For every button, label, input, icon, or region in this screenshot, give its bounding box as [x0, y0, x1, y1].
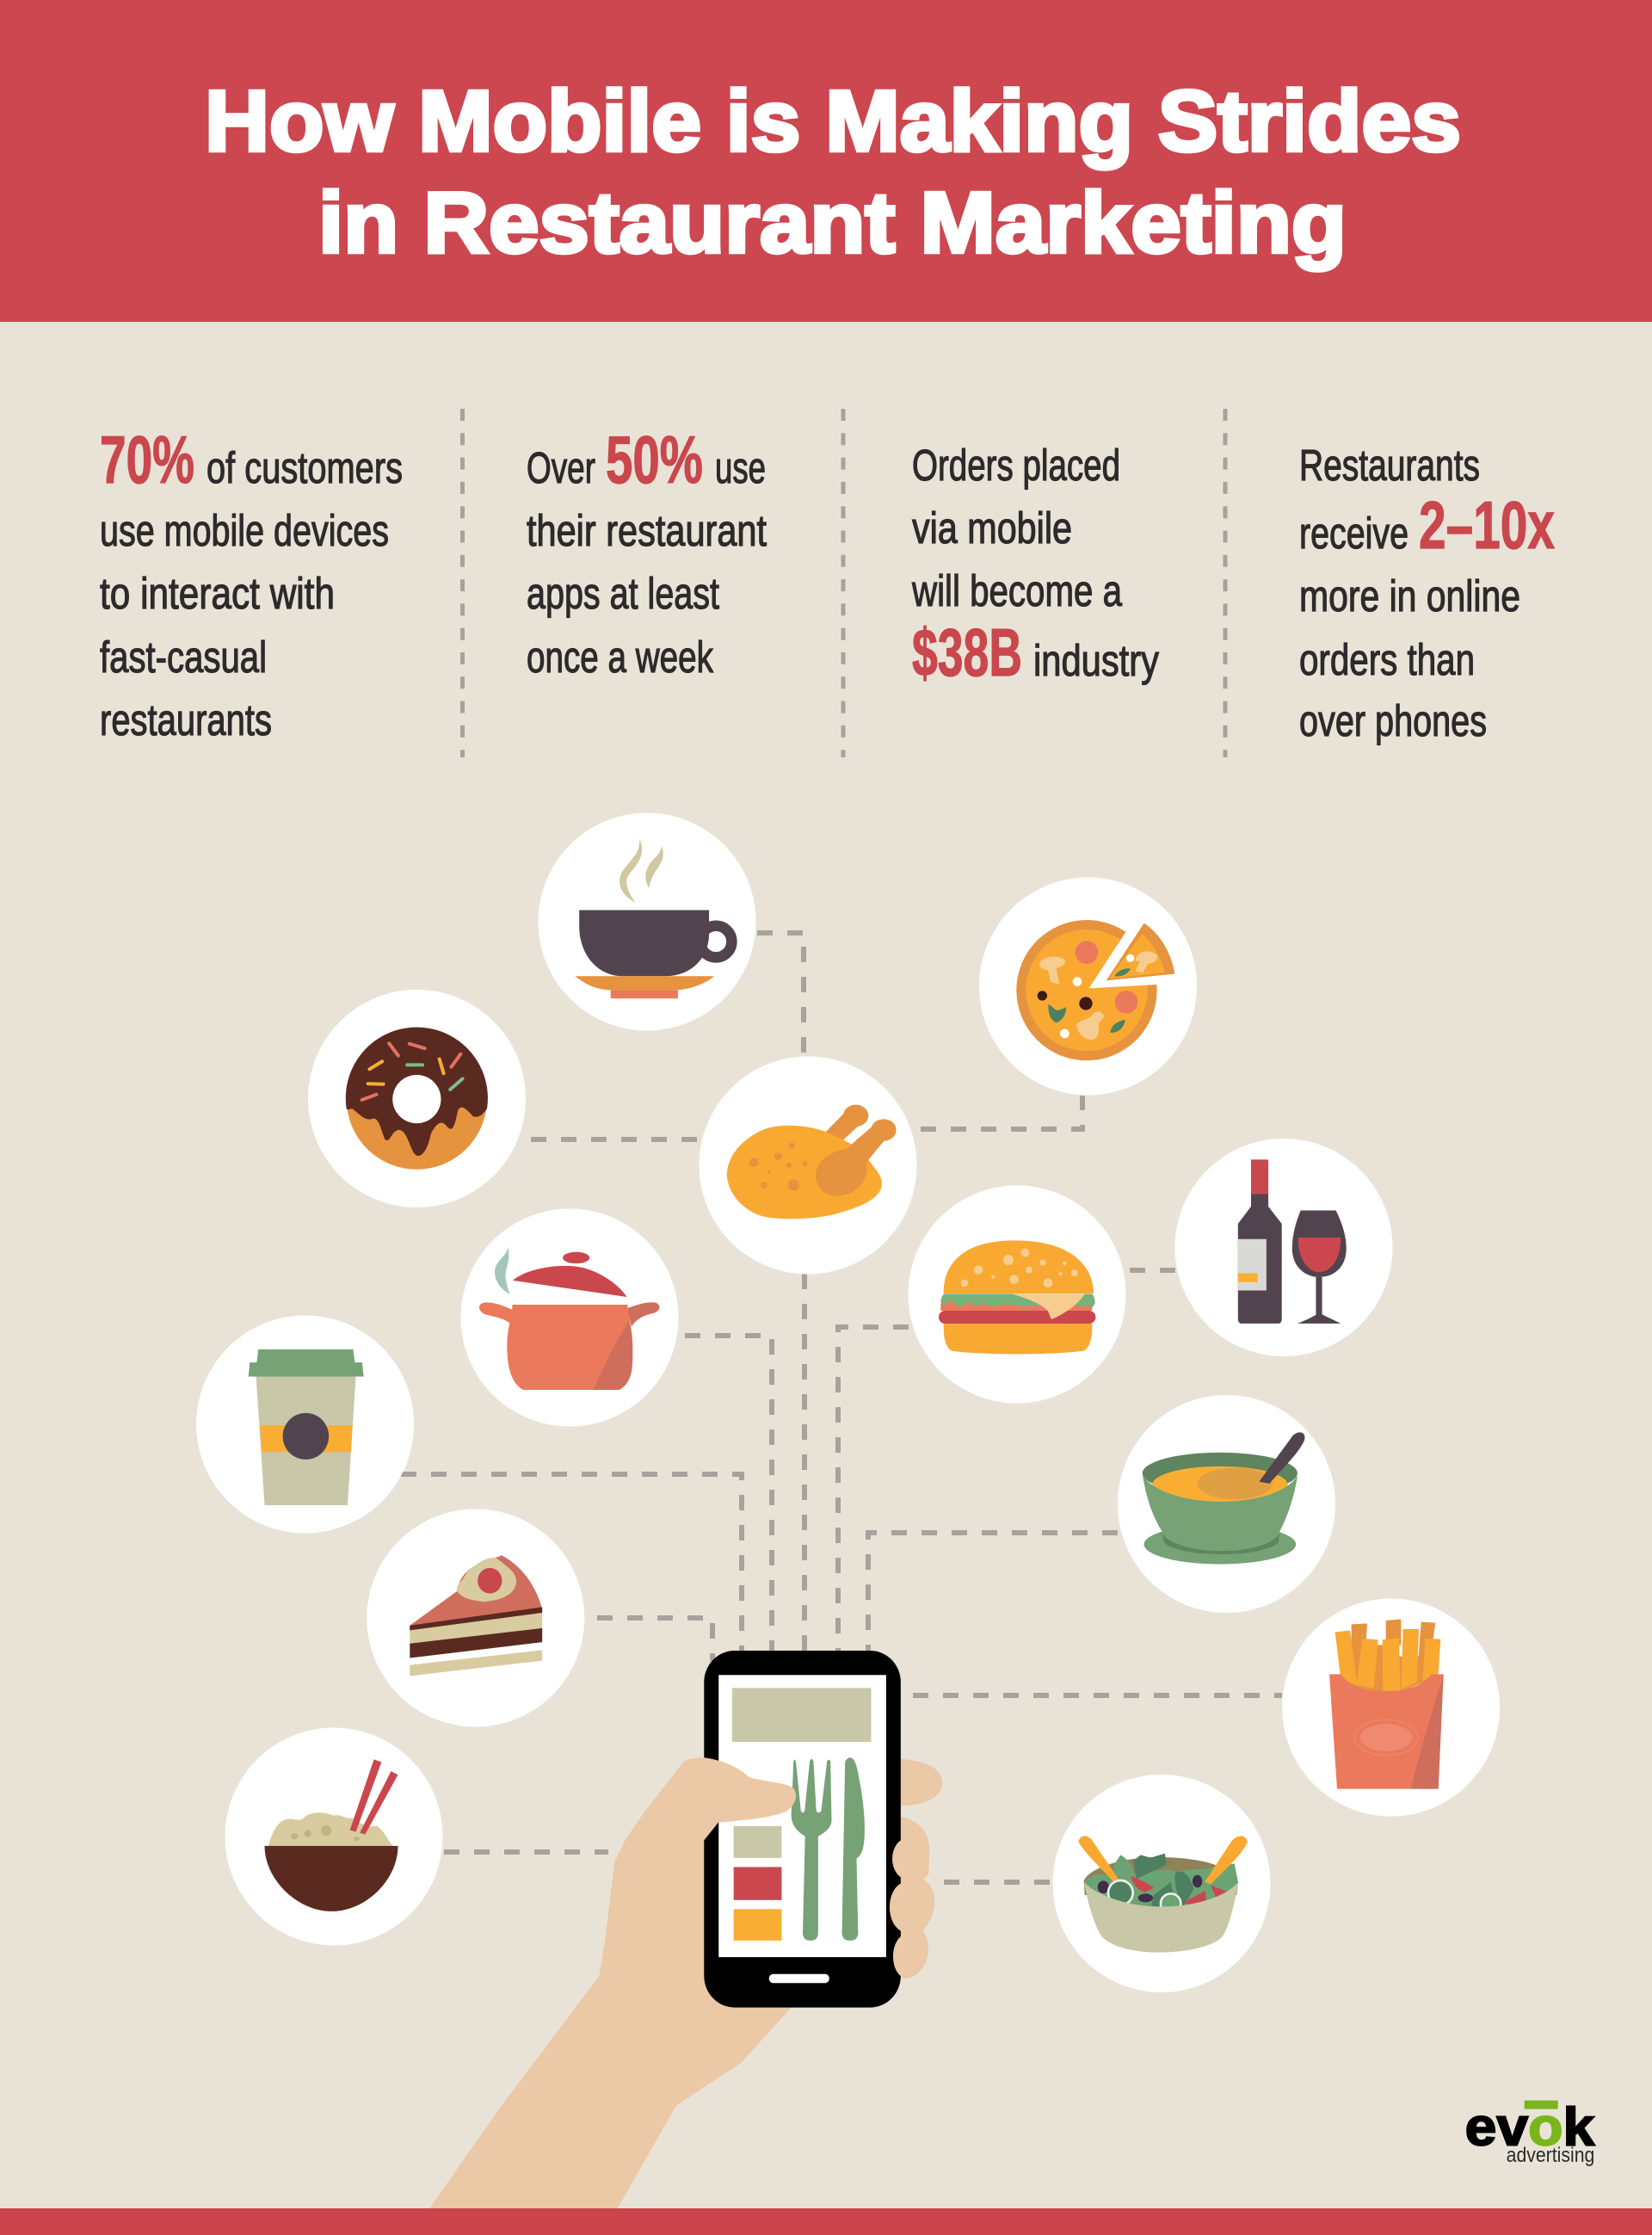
stat: 2–10x: 2–10x	[1419, 487, 1555, 563]
stat: $38B: will become a	[911, 566, 1122, 615]
stat: $38B: via mobile	[912, 503, 1072, 553]
stat: 2–10x: over phones	[1299, 696, 1487, 745]
icon: coffee cup	[539, 812, 755, 1031]
stat: $38B	[911, 441, 1159, 690]
stat: 2–10x: orders than	[1299, 635, 1475, 684]
stat: 2–10x: Restaurants	[1299, 441, 1480, 490]
stat: 2–10x: receive	[1299, 509, 1409, 558]
icon: wine bottle and glass	[1175, 1139, 1392, 1356]
icon: noodle bowl	[225, 1728, 442, 1945]
icon: takeaway coffee	[196, 1315, 414, 1534]
thumb	[680, 1757, 796, 1840]
icon: fries	[1282, 1599, 1500, 1816]
stat: 70% of customers: 70%	[100, 422, 194, 497]
title: in Restaurant Marketing	[318, 175, 1347, 271]
header band	[0, 0, 1652, 322]
stat: $38B: industry	[1033, 636, 1159, 685]
stat: over 50%	[527, 422, 767, 682]
icon: pot	[461, 1208, 678, 1427]
hand and arm	[428, 1757, 853, 2210]
phone	[704, 1651, 901, 2008]
connector lines	[401, 933, 1282, 1882]
icon: salad	[1053, 1775, 1270, 1992]
fingers behind phone	[895, 1759, 942, 1979]
footer band	[0, 2208, 1652, 2235]
icon: cake slice	[367, 1510, 584, 1726]
stat: 2–10x	[1299, 441, 1555, 745]
title: How Mobile is Making Strides	[205, 73, 1461, 170]
stat: $38B: $38B	[912, 614, 1022, 690]
icon: donut	[308, 990, 526, 1207]
stat: over 50%: 50%	[606, 422, 703, 497]
stat: over 50%: once a week	[527, 633, 713, 682]
stat: over 50%: use	[715, 443, 766, 492]
icon: soup bowl	[1118, 1395, 1335, 1613]
icon: burger	[909, 1186, 1125, 1403]
stat: 70% of customers: restaurants	[100, 695, 272, 744]
icon: pizza	[979, 878, 1197, 1095]
logo: evok advertising: advertising	[1507, 2144, 1594, 2167]
fingertips	[890, 1838, 923, 1979]
stat: over 50%: apps at least	[527, 569, 719, 618]
stat: 70% of customers: to interact with	[100, 569, 335, 618]
stat: 70% of customers: fast-casual	[100, 633, 267, 682]
stat: over 50%: Over	[527, 443, 595, 492]
illustration: hand holding phone	[428, 1651, 942, 2210]
title	[205, 73, 1461, 271]
stat: $38B: Orders placed	[912, 441, 1120, 490]
stat: 70% of customers	[100, 422, 403, 744]
stat: 70% of customers: of customers	[206, 443, 403, 492]
stat: 2–10x: more in online	[1299, 571, 1520, 620]
stat: over 50%: their restaurant	[527, 506, 767, 555]
logo: evok advertising: evok	[1465, 2098, 1595, 2158]
icon: roast chicken	[699, 1057, 917, 1274]
stat: 70% of customers: use mobile devices	[100, 506, 389, 555]
